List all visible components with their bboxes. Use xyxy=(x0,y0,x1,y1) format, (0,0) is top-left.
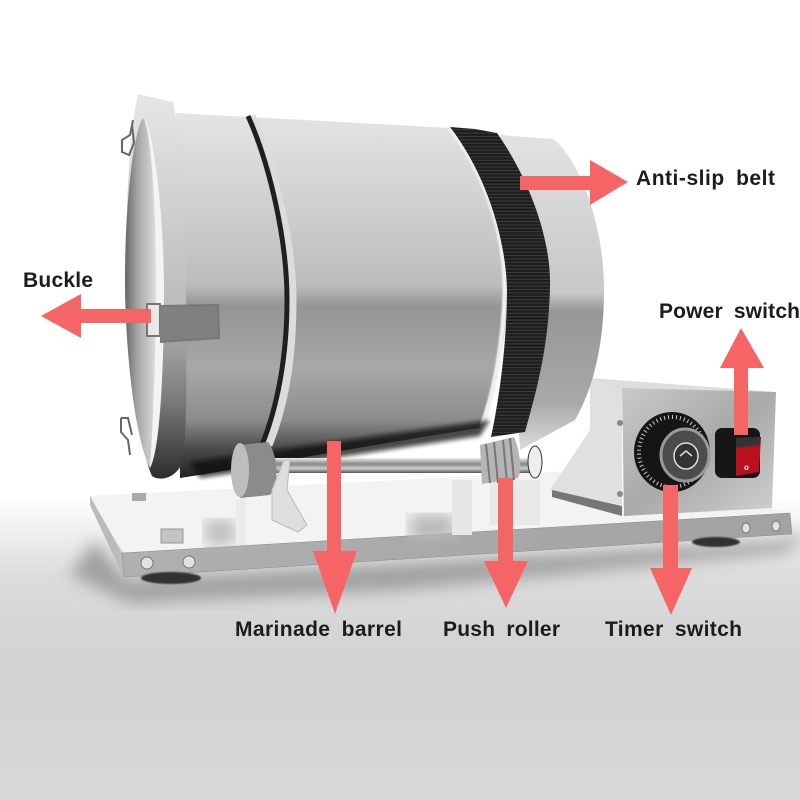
bottom clip xyxy=(121,418,132,455)
barrel flange and lid xyxy=(125,94,186,479)
barrel rear section xyxy=(500,135,604,450)
base plate xyxy=(90,470,792,584)
arrow: push roller xyxy=(484,478,528,608)
barrel body xyxy=(176,113,508,478)
label: push roller: Push roller xyxy=(443,618,560,641)
power switch xyxy=(715,428,761,478)
highlight edge of barrel xyxy=(450,128,505,426)
power switch: o xyxy=(744,463,749,472)
label: anti-slip belt: Anti-slip belt xyxy=(636,167,775,190)
floor shadow xyxy=(70,525,800,603)
label: marinade barrel: Marinade barrel xyxy=(235,618,402,641)
barrel lower shadow xyxy=(190,420,490,478)
control box xyxy=(550,378,776,516)
timer dial xyxy=(634,412,710,492)
label: timer switch: Timer switch xyxy=(605,618,742,641)
label: buckle: Buckle xyxy=(23,269,93,292)
label: power switch: Power switch xyxy=(659,300,800,323)
arrow: timer switch xyxy=(650,485,692,615)
top clip xyxy=(122,120,134,155)
arrow: marinade barrel xyxy=(313,441,357,614)
arrow: buckle xyxy=(41,294,151,338)
anti-slip belt xyxy=(450,127,550,437)
seam ring xyxy=(248,116,292,445)
arrow: anti-slip belt xyxy=(520,160,628,205)
buckle xyxy=(147,304,219,342)
arrow: power switch xyxy=(720,328,764,435)
roller assembly xyxy=(231,437,542,545)
